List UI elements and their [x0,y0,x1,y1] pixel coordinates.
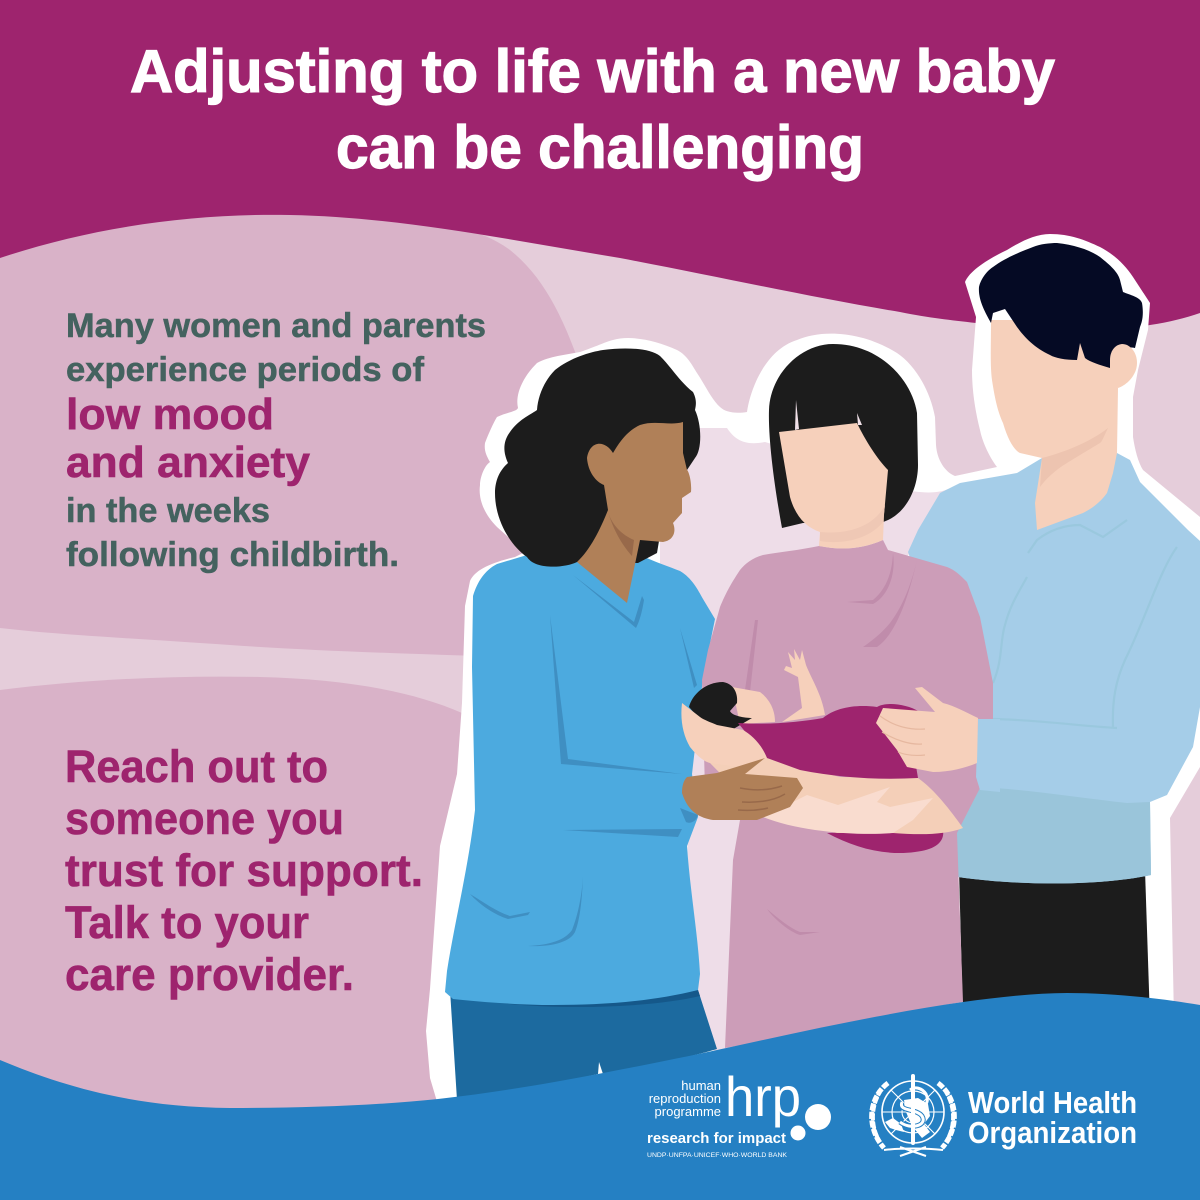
mother neck shadow [820,505,885,542]
text block: reach out message: trust for support. [65,845,423,896]
man's shirt cuff [976,719,1000,792]
nurse trousers [450,990,717,1100]
man's hand creases [880,716,925,755]
text block: low mood message: Many women and parents [66,307,486,345]
panel: upper pink blob [0,214,600,660]
text block: low mood message: and anxiety [66,438,311,487]
nurse hair [495,348,700,567]
figure: man on right [908,243,1200,1020]
man neck shadow [1040,428,1108,487]
nurse neck shadow [608,512,634,556]
logo: hrp: human [681,1078,721,1093]
globe grid [882,1081,944,1156]
logo: World Health Organization: Organization [968,1115,1137,1150]
logo: hrp: hrp [725,1065,801,1128]
figure: woman on left (nurse) [445,348,717,1100]
baby arm [782,649,825,722]
text block: reach out message: someone you [65,793,344,844]
text block: reach out message: Reach out to [65,741,328,792]
mother's hand, lighter [763,787,933,834]
man hair [979,243,1143,368]
baby drape below arm [827,830,943,853]
inner pale background [660,428,948,1060]
mother hair [769,344,918,528]
logo: World Health Organization: World Health [968,1085,1137,1120]
fringe slits [795,400,862,430]
logo: World Health Organization [968,1085,1137,1150]
text block: low mood message: experience periods of [66,351,425,389]
man face and neck [991,320,1118,530]
baby body [738,704,920,779]
nurse hand [682,758,803,820]
man shirt folds [993,520,1177,728]
man shirt lower shade [950,787,1151,884]
nurse coat [445,555,715,1005]
text block: reach out message [65,741,423,1000]
mother dress [702,540,993,1048]
man's hand [876,687,978,772]
text block: low mood message [66,307,486,574]
text block: low mood message: low mood [66,390,274,439]
baby face [732,687,775,724]
panel: lower pink blob [0,677,470,1110]
white outline behind figures [426,234,1200,1105]
man shirt [908,453,1200,884]
laurel leaves [872,1083,954,1148]
logo: hrp: reproduction [649,1091,721,1106]
mother's forearm [710,758,963,834]
man trousers [959,870,1150,1020]
header band [0,0,1200,329]
continents [885,1098,930,1138]
text block: low mood message: following childbirth. [66,536,399,574]
logo: WHO emblem [872,1076,954,1156]
logo: hrp: UNDP·UNFPA·UNICEF·WHO·WORLD BANK [647,1152,787,1159]
text block: reach out message: care provider. [65,949,354,1000]
figure: woman in centre with baby [681,344,1000,1048]
logo: hrp [647,1065,831,1159]
man ear [1110,344,1137,388]
nurse face [577,422,691,603]
title: can be challenging [336,114,864,181]
title: Adjusting to life with a new baby [130,38,1056,105]
nurse hand creases [738,786,785,810]
mother face [779,423,888,548]
logo: hrp: programme [655,1104,721,1119]
baby hair [689,682,752,731]
title [130,38,1056,181]
text block: reach out message: Talk to your [65,897,309,948]
mother's hand under head [681,703,767,768]
footer wave [0,993,1200,1200]
nurse collar and folds [470,575,698,946]
mother dress folds [745,553,917,935]
staff and serpent [900,1076,927,1143]
text block: low mood message: in the weeks [66,492,270,530]
nurse trouser shadow [500,990,700,1007]
logo: hrp: research for impact [647,1130,786,1147]
